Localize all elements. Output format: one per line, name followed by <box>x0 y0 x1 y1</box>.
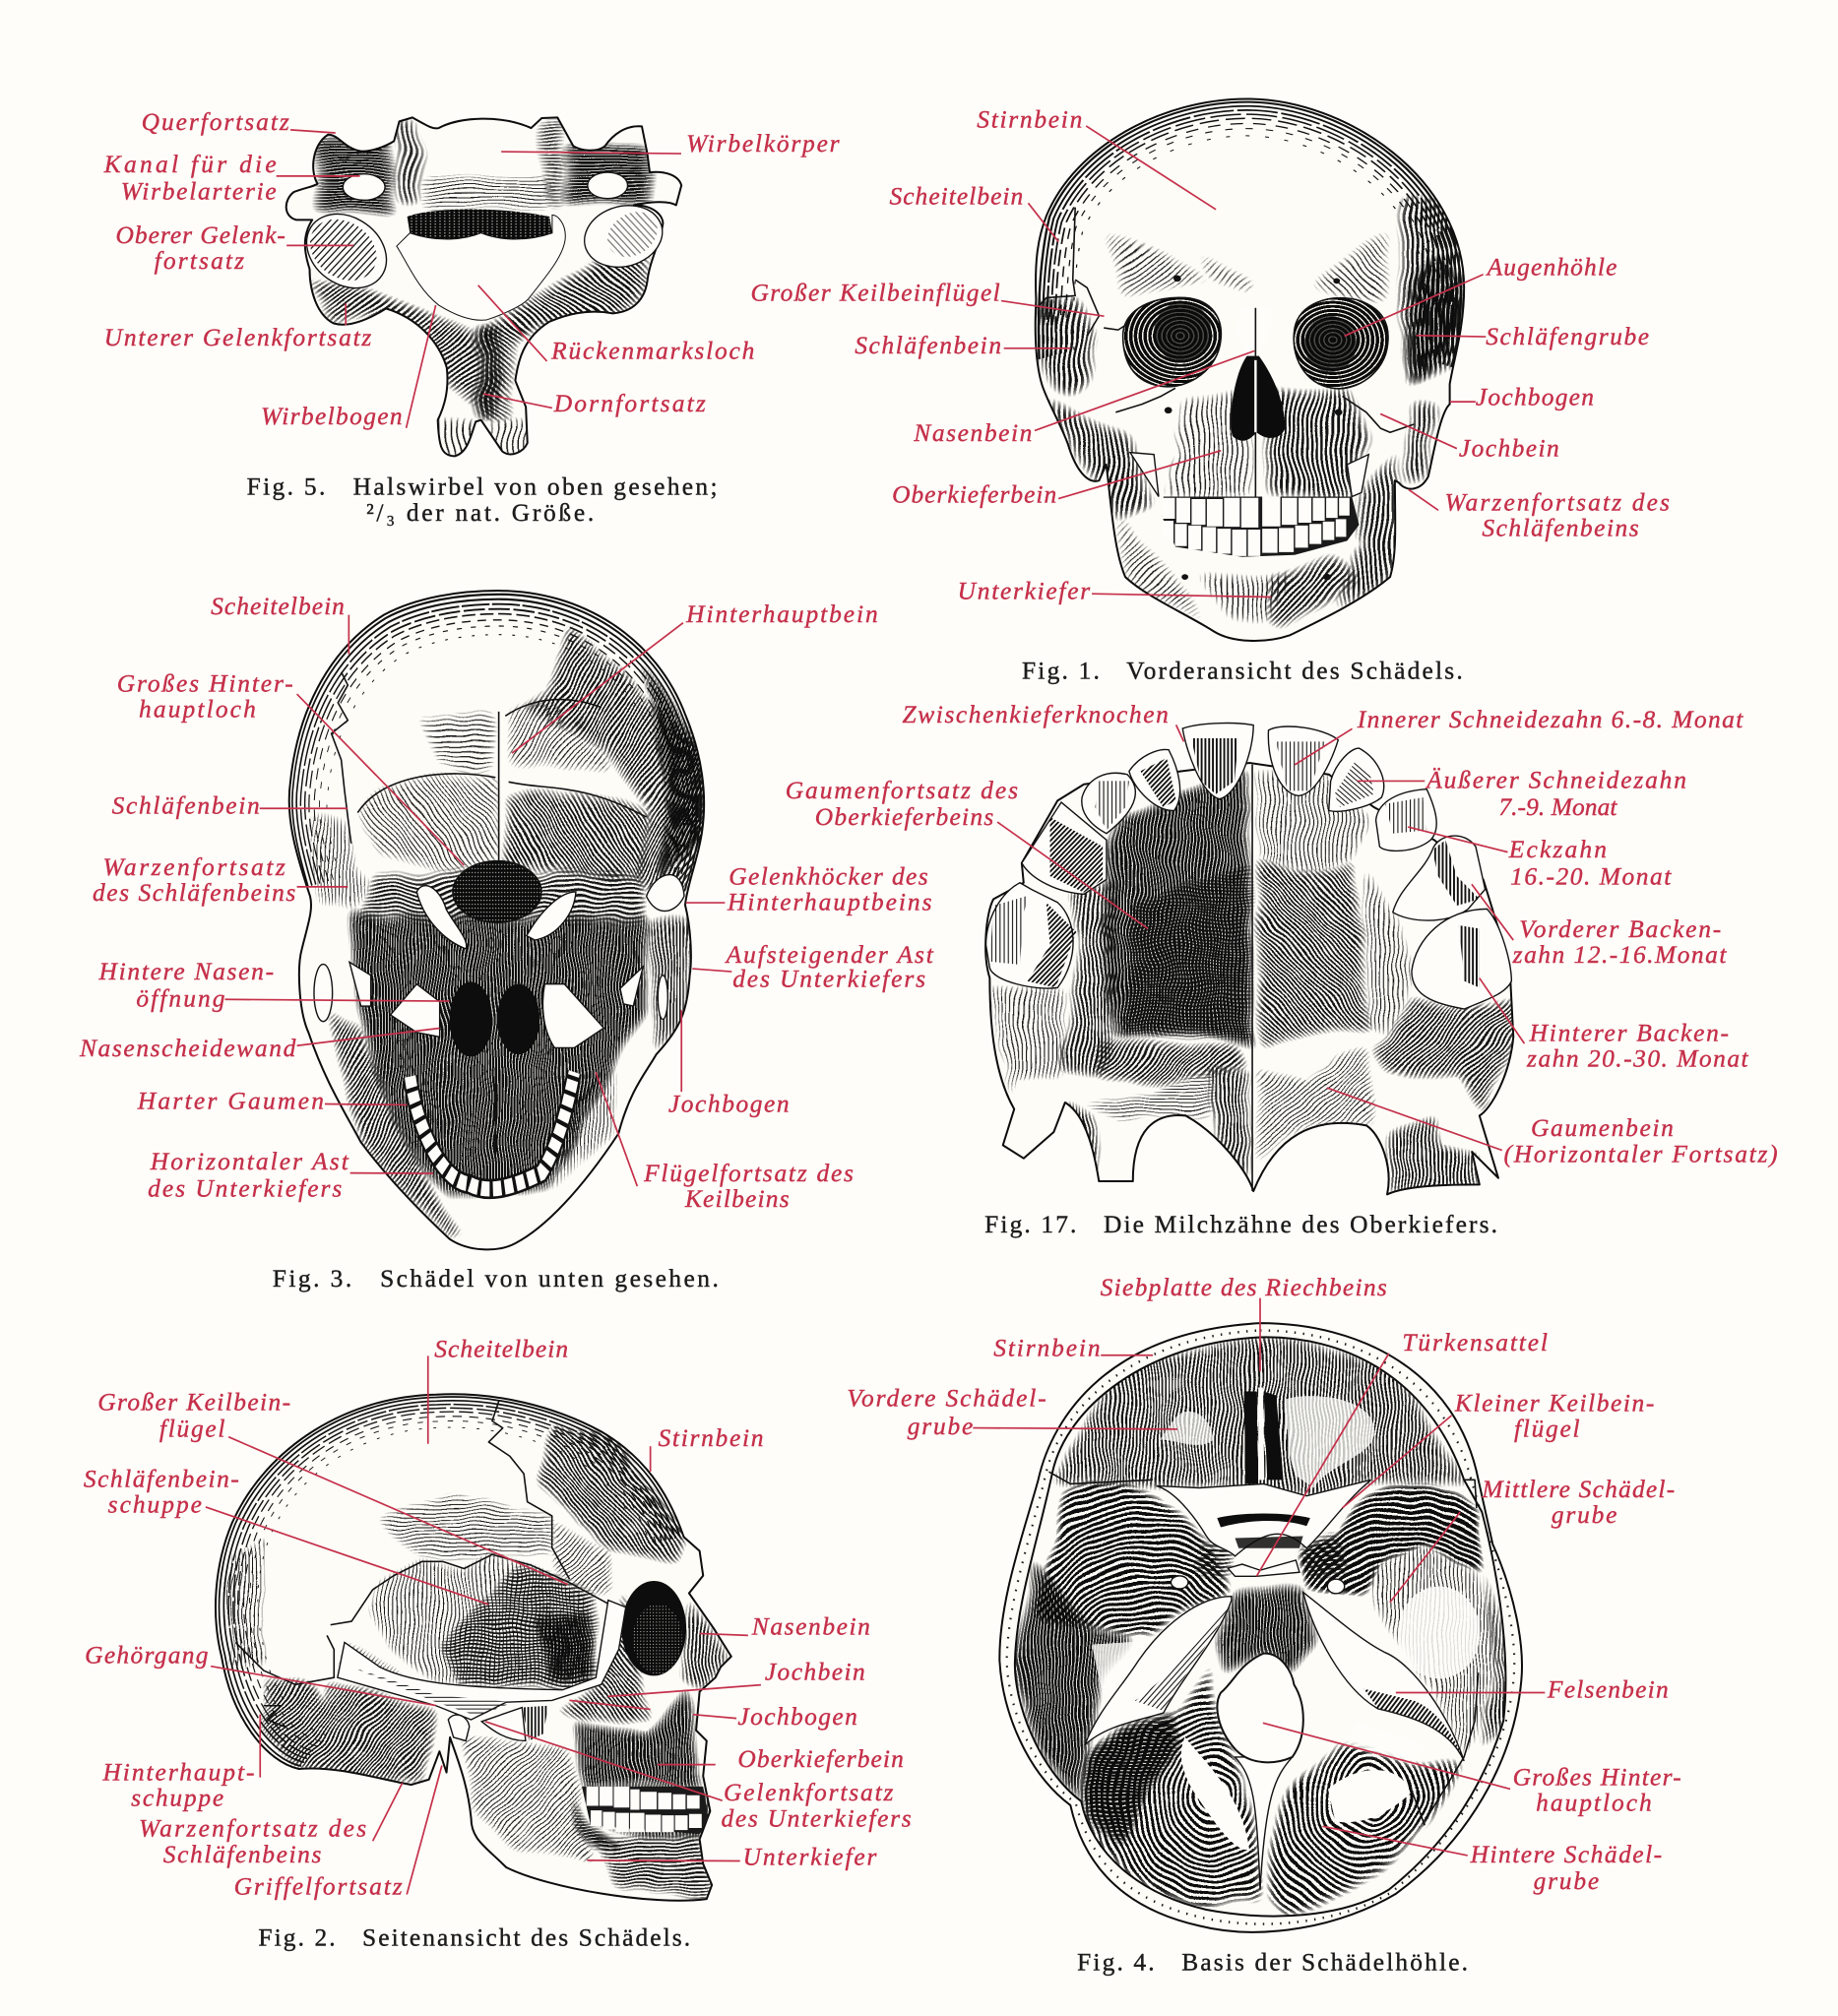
label: Kanal für die Wirbelarterie: Wirbelarterie <box>121 176 277 205</box>
label: Horizontaler Ast des Unterkiefers: Horizontaler Ast <box>150 1147 349 1175</box>
label: Flügelfortsatz des Keilbeins: Flügelfortsatz des <box>643 1159 854 1187</box>
caption: Fig. 5 <box>247 472 718 527</box>
choanae <box>450 981 492 1056</box>
label: Großer Keilbeinflügel <box>97 1387 568 1585</box>
label: Nasenbein: Nasenbein <box>751 1612 870 1641</box>
caption: Fig. 17: Fig. 17. Die Milchzähne des Oberkiefers. <box>984 1210 1497 1238</box>
label: Kanal für die Wirbelarterie <box>103 150 360 205</box>
canine teeth <box>1082 773 1135 834</box>
label: Warzenfortsatz des Schläfenbeins: Warzenfortsatz des <box>139 1814 366 1843</box>
label: Warzenfortsatz des Schläfenbeins: Warzenfortsatz des <box>1444 487 1670 516</box>
label: Oberer Gelenkfortsatz: Oberer Gelenk- <box>116 220 285 249</box>
label: Oberkieferbein <box>892 451 1221 509</box>
label: Kleiner Keilbeinflügel: flügel <box>1514 1415 1580 1443</box>
label: Zwischenkieferknochen: Zwischenkieferknochen <box>903 700 1169 728</box>
caption: Fig. 5: ²/₃ der nat. Größe. <box>366 498 594 527</box>
label: Schläfengrube: Schläfengrube <box>1486 322 1649 350</box>
label: Scheitelbein: Scheitelbein <box>889 182 1023 211</box>
eye socket left <box>1123 297 1221 387</box>
label: Kleiner Keilbeinflügel: Kleiner Keilbein- <box>1454 1389 1654 1418</box>
label: Felsenbein: Felsenbein <box>1547 1675 1669 1704</box>
label: Jochbogen: Jochbogen <box>668 1089 790 1117</box>
sutures <box>235 1400 608 1727</box>
label: Vordere Schädelgrube: grube <box>908 1412 973 1440</box>
label: Siebplatte des Riechbeins: Siebplatte des Riechbeins <box>1101 1273 1387 1301</box>
bottom suture <box>1049 1472 1479 1825</box>
label: Wirbelbogen: Wirbelbogen <box>261 402 403 430</box>
label: Äußerer Schneidezahn: 7.-9. Monat <box>1498 792 1617 821</box>
superior articular facets <box>294 209 399 293</box>
vertebral canal <box>397 215 565 320</box>
label: Jochbogen: Jochbogen <box>737 1702 857 1731</box>
label: Hintere Nasenöffnung: öffnung <box>136 983 224 1012</box>
label: Großes Hinterhauptloch: hauptloch <box>139 695 256 724</box>
illustration: skull, front <box>1033 98 1469 641</box>
label: Gelenkfortsatz des Unterkiefers: Gelenkfortsatz <box>724 1778 893 1806</box>
label: Großes Hinterhauptloch <box>117 668 464 865</box>
label: Gelenkfortsatz des Unterkiefers: des Unterkiefers <box>721 1803 912 1832</box>
label: Rückenmarksloch <box>478 285 754 364</box>
cheek and maxilla <box>559 1595 652 1725</box>
gap below the arch <box>481 1708 526 1740</box>
label: Gaumenbein: (Horizontaler Fortsatz) <box>1504 1139 1778 1167</box>
label: Aufsteigender Ast des Unterkiefers <box>692 940 934 993</box>
label: Nasenbein <box>913 350 1254 447</box>
label: Gelenkfortsatz des Unterkiefers <box>485 1722 912 1832</box>
ovals beside the sella <box>1171 1576 1188 1589</box>
label: Dornfortsatz: Dornfortsatz <box>553 389 706 417</box>
eye socket <box>621 1581 686 1675</box>
label: Großer Keilbeinflügel: Großer Keilbeinflügel <box>750 279 1000 307</box>
label: Gaumenfortsatz des Oberkieferbeins: Gaumenfortsatz des <box>786 776 1018 804</box>
panel: Fig. 5 cervical vertebra <box>103 107 840 527</box>
label: Warzenfortsatz des Schläfenbeins <box>93 852 348 907</box>
label: Großes Hinterhauptloch: Großes Hinter- <box>117 668 293 697</box>
label: Griffelfortsatz: Griffelfortsatz <box>234 1871 403 1900</box>
label: Jochbogen <box>569 1700 857 1731</box>
label: Nasenscheidewand <box>79 1028 440 1062</box>
label: Warzenfortsatz des Schläfenbeins: Schläfenbeins <box>1482 513 1639 541</box>
right molars <box>1393 836 1486 920</box>
left posterior fossa <box>1078 1657 1267 1914</box>
label: Vorderer Backenzahn <box>1472 884 1727 969</box>
clivus <box>1214 1584 1321 1676</box>
label: Rückenmarksloch: Rückenmarksloch <box>550 336 754 364</box>
caption: Fig. 5: Fig. 5. Halswirbel von oben gesehen; <box>247 472 718 501</box>
label: Jochbogen: Jochbogen <box>1476 382 1594 410</box>
label: Querfortsatz: Querfortsatz <box>142 107 289 136</box>
gaps beside the jaw <box>1347 455 1368 497</box>
label: Mittlere Schädelgrube <box>1390 1475 1675 1603</box>
label: Hinterer Backenzahn: zahn 20.-30. Monat <box>1526 1044 1749 1073</box>
label: Oberer Gelenkfortsatz: fortsatz <box>155 246 244 275</box>
label: Warzenfortsatz des Schläfenbeins <box>1409 487 1670 541</box>
label: Hinterhauptbein <box>512 599 878 753</box>
label: Äußerer Schneidezahn <box>1357 765 1686 821</box>
label: Unterkiefer: Unterkiefer <box>958 576 1090 604</box>
label: Jochbogen <box>668 1010 790 1117</box>
falx ridge <box>1236 1757 1293 1890</box>
label: Unterer Gelenkfortsatz: Unterer Gelenkfortsatz <box>104 323 371 351</box>
label: Großer Keilbeinflügel: flügel <box>159 1415 224 1443</box>
midline and sutures <box>332 672 647 1156</box>
label: Großes Hinterhauptloch <box>1263 1723 1681 1817</box>
label: Hinterer Backenzahn <box>1480 978 1749 1073</box>
concentric cranial shading lines <box>1039 102 1461 367</box>
label: Großer Keilbeinflügel: Großer Keilbein- <box>97 1387 290 1416</box>
label: Eckzahn: Eckzahn <box>1508 835 1607 863</box>
lower jaw <box>461 1733 598 1863</box>
panel: Fig. 3 skull seen from below <box>79 591 934 1292</box>
label: Äußerer Schneidezahn: Äußerer Schneidezahn <box>1425 765 1686 793</box>
label: Stirnbein <box>977 104 1216 210</box>
zygomatic arch <box>338 1601 626 1720</box>
jaw edge shading <box>1116 518 1201 618</box>
left petrous ridge <box>1085 1597 1232 1745</box>
label: Jochbein: Jochbein <box>1459 434 1559 463</box>
label: Wirbelbogen <box>261 305 436 430</box>
right petrous ridge <box>1303 1593 1464 1761</box>
label: Gehörgang <box>85 1640 436 1706</box>
label: Mittlere Schädelgrube: Mittlere Schädel- <box>1481 1475 1675 1503</box>
sutures <box>1037 208 1414 432</box>
label: Schläfenbein: Schläfenbein <box>112 790 260 819</box>
label: Scheitelbein <box>889 182 1058 241</box>
label: Oberkieferbein: Oberkieferbein <box>737 1744 904 1773</box>
label: Vorderer Backenzahn: zahn 12.-16.Monat <box>1512 940 1727 969</box>
base of the skull behind the palate <box>351 870 650 927</box>
label: Kanal für die Wirbelarterie: Kanal für die <box>103 150 277 178</box>
sphenoid ridge <box>1157 1480 1371 1556</box>
label: Augenhöhle: Augenhöhle <box>1486 252 1616 281</box>
palate and mouth <box>348 910 650 1199</box>
caption: Fig. 3: Fig. 3. Schädel von unten gesehen. <box>273 1264 719 1292</box>
label: Kleiner Keilbeinflügel <box>1343 1389 1654 1508</box>
label: Hinterhauptschuppe <box>101 1715 260 1811</box>
panel: Fig. 17 milk teeth of the upper jaw <box>786 700 1778 1238</box>
label: Flügelfortsatz des Keilbeins <box>596 1072 854 1213</box>
label: Harter Gaumen: Harter Gaumen <box>137 1087 324 1115</box>
label: Hintere Nasenöffnung: Hintere Nasen- <box>98 957 274 985</box>
label: Gelenkhöcker des Hinterhauptbeins <box>686 861 932 915</box>
label: Augenhöhle <box>1345 252 1616 336</box>
occipital condyles <box>416 886 467 949</box>
left and right middle fossae <box>1031 1480 1236 1637</box>
label: Großes Hinterhauptloch: hauptloch <box>1536 1789 1652 1817</box>
label: Zwischenkieferknochen <box>903 700 1183 741</box>
transverse foramina <box>343 174 385 200</box>
illustration: vertebra seen from above <box>286 117 681 460</box>
teeth <box>1162 497 1360 557</box>
panel: Fig. 1 front view of the skull <box>750 98 1670 684</box>
caption: Fig. 1: Fig. 1. Vorderansicht des Schädels. <box>1022 656 1463 684</box>
label: Großer Keilbeinflügel <box>750 279 1105 316</box>
label: Vorderer Backenzahn: Vorderer Backen- <box>1519 914 1721 943</box>
right posterior fossa <box>1267 1741 1468 1918</box>
label: Gaumenfortsatz des Oberkieferbeins: Oberkieferbeins <box>815 802 993 831</box>
label: Horizontaler Ast des Unterkiefers <box>148 1147 433 1203</box>
light patches of the fossae <box>1092 1396 1481 1850</box>
label: Hintere Nasenöffnung <box>98 957 450 1012</box>
label: Schläfenbein: Schläfenbein <box>855 331 1001 359</box>
label: Horizontaler Ast des Unterkiefers: des Unterkiefers <box>148 1174 342 1203</box>
white openings <box>314 965 333 1022</box>
mid-face shading <box>1161 388 1256 501</box>
panel: Fig. 4 base of the cranial cavity <box>847 1273 1681 1976</box>
label: Hintere Schädelgrube <box>1322 1826 1662 1895</box>
label: Hinterhauptschuppe: schuppe <box>131 1783 223 1811</box>
illustration: skull, underside <box>289 591 709 1249</box>
label: Nasenbein: Nasenbein <box>913 418 1032 447</box>
teeth <box>582 1787 709 1834</box>
dark left palate <box>1100 765 1257 1056</box>
nasal cavity <box>1231 356 1285 441</box>
label: Warzenfortsatz des Schläfenbeins <box>139 1783 403 1868</box>
eye socket right <box>1294 298 1388 389</box>
illustration: upper jaw and palate <box>985 724 1517 1198</box>
panel: Fig. 2 side view of the skull <box>84 1335 912 1952</box>
teeth arc <box>411 1072 574 1189</box>
label: Innerer Schneidezahn <box>1295 705 1743 765</box>
label: Mittlere Schädelgrube: grube <box>1552 1500 1616 1529</box>
caption: Fig. 2: Fig. 2. Seitenansicht des Schädels. <box>258 1923 690 1952</box>
label: Stirnbein: Stirnbein <box>993 1333 1101 1361</box>
concentric cranial shading lines <box>292 595 701 891</box>
label: Scheitelbein: Scheitelbein <box>211 592 345 620</box>
label: Jochbein <box>608 1657 865 1696</box>
label: Vordere Schädelgrube <box>847 1383 1177 1440</box>
label: Aufsteigender Ast des Unterkiefers: des Unterkiefers <box>732 965 925 993</box>
right zygomatic region light <box>647 875 684 912</box>
label: Eckzahn: 16.-20. Monat <box>1510 861 1672 890</box>
label: Unterkiefer: Unterkiefer <box>743 1842 877 1870</box>
label: Oberkieferbein: Oberkieferbein <box>892 480 1056 509</box>
incisor teeth <box>1182 724 1253 799</box>
label: Schläfenbeinschuppe: Schläfenbein- <box>84 1465 239 1493</box>
midline <box>1251 765 1253 1191</box>
label: Gaumenbein: Gaumenbein <box>1531 1113 1674 1142</box>
label: Hintere Schädelgrube: grube <box>1534 1866 1599 1895</box>
label: Warzenfortsatz des Schläfenbeins: Warzenfortsatz <box>102 852 285 881</box>
label: Hintere Schädelgrube: Hintere Schädel- <box>1470 1840 1662 1868</box>
anterior fossa shading <box>1046 1331 1471 1500</box>
concentric cranial shading lines <box>220 1397 680 1766</box>
label: Jochbein <box>1380 413 1559 463</box>
label: Stirnbein <box>651 1423 764 1472</box>
label: Türkensattel <box>1256 1328 1548 1576</box>
skull wall stipple <box>1007 1331 1514 1924</box>
label: Hinterhauptbein: Hinterhauptbein <box>685 599 878 628</box>
label: Griffelfortsatz <box>234 1766 442 1900</box>
frontal crest <box>1244 1392 1284 1483</box>
label: Dornfortsatz <box>483 389 706 417</box>
label: Aufsteigender Ast des Unterkiefers: Aufsteigender Ast <box>725 940 934 969</box>
label: Hinterhauptschuppe: Hinterhaupt- <box>101 1757 255 1786</box>
caption: Fig. 4: Fig. 4. Basis der Schädelhöhle. <box>1077 1947 1468 1976</box>
label: Schläfenbeinschuppe: schuppe <box>108 1490 202 1519</box>
label: Warzenfortsatz des Schläfenbeins: Schläfenbeins <box>163 1840 321 1868</box>
label: Wirbelkörper: Wirbelkörper <box>686 129 840 158</box>
label: Unterkiefer <box>958 576 1271 604</box>
label: Schläfenbeinschuppe <box>84 1465 488 1605</box>
label: Türkensattel: Türkensattel <box>1402 1328 1548 1356</box>
temporal squama <box>369 1551 595 1688</box>
label: Eckzahn <box>1408 827 1672 890</box>
nasal bones <box>1236 308 1273 356</box>
label: Scheitelbein: Scheitelbein <box>434 1335 568 1363</box>
label: Gaumenbein <box>1327 1088 1778 1167</box>
illustration: skull, side <box>216 1394 734 1903</box>
left molars <box>1022 802 1107 894</box>
illustration: cranial base <box>999 1323 1522 1932</box>
foramen magnum <box>1217 1654 1303 1762</box>
label: Nasenscheidewand: Nasenscheidewand <box>79 1034 296 1062</box>
label: Vordere Schädelgrube: Vordere Schädel- <box>847 1383 1046 1412</box>
label: Hinterer Backenzahn: Hinterer Backen- <box>1529 1019 1729 1047</box>
label: Großes Hinterhauptloch: Großes Hinter- <box>1513 1762 1681 1791</box>
label: Gaumenfortsatz des Oberkieferbeins <box>786 776 1148 928</box>
lateral incisor teeth <box>1129 749 1180 810</box>
label: Stirnbein: Stirnbein <box>977 104 1082 133</box>
foramen magnum <box>453 861 541 922</box>
label: Jochbein: Jochbein <box>765 1657 865 1685</box>
label: Gelenkhöcker des Hinterhauptbeins: Hinterhauptbeins <box>727 887 932 915</box>
label: Gelenkhöcker des Hinterhauptbeins: Gelenkhöcker des <box>729 861 928 890</box>
label: Stirnbein: Stirnbein <box>658 1423 764 1452</box>
label: Innerer Schneidezahn: Innerer Schneidezahn 6.-8. Monat <box>1357 705 1743 733</box>
label: Gehörgang: Gehörgang <box>85 1640 209 1669</box>
label: Oberer Gelenkfortsatz <box>116 220 353 275</box>
dark crosshatch below the vertebral body <box>408 209 552 239</box>
label: Flügelfortsatz des Keilbeins: Keilbeins <box>684 1184 790 1213</box>
label: Warzenfortsatz des Schläfenbeins: des Schläfenbeins <box>93 878 295 907</box>
